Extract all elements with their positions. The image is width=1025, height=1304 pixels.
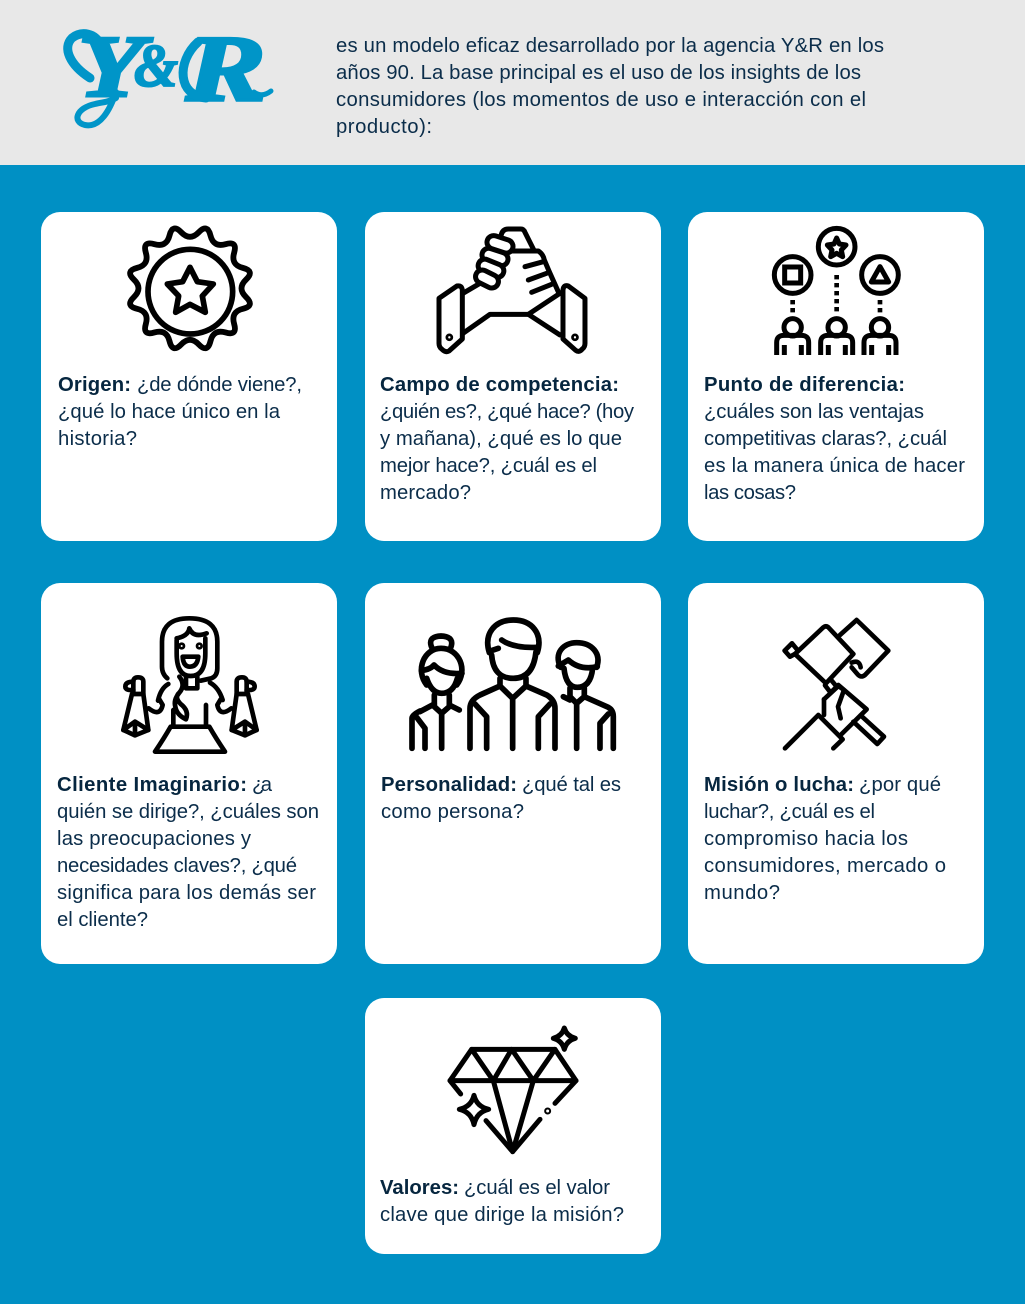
intro text: años 90. La base principal es el uso de los insights de los [336,62,861,84]
text: cliente imaginario: Cliente Imaginario: [57,774,247,796]
text: cliente imaginario: las preocupaciones y [57,828,252,850]
text: cliente imaginario: significa para los demás ser [57,882,316,904]
text: punto de diferencia [704,374,965,504]
panel: misión o lucha [688,583,984,964]
text: origen: Origen: [58,374,131,396]
panel: punto de diferencia [688,212,984,541]
text: campo de competencia [380,374,635,504]
text: punto de diferencia: competitivas claras?, ¿cuál [704,428,947,450]
icon: group of three people [412,620,613,748]
text: origen: ¿qué lo hace único en la [58,401,281,423]
panel: personalidad [365,583,661,964]
text: misión o lucha: Misión o lucha: [704,774,854,796]
text: origen: ¿de dónde viene?, [137,374,302,396]
text: misión o lucha: compromiso hacia los [704,828,908,850]
text: cliente imaginario: el cliente? [57,909,148,931]
intro text: producto): [336,116,432,138]
intro text: consumidores (los momentos de uso e interacción con el [336,89,866,111]
text: campo de competencia: Campo de competencia: [380,374,619,396]
text: personalidad: ¿qué tal es [522,774,621,796]
text: punto de diferencia: ¿cuáles son las ventajas [704,401,924,423]
text: punto de diferencia: las cosas? [704,482,796,504]
logo: Y&R: Y [78,19,153,116]
text: cliente imaginario: quién se dirige?, ¿cuáles son [57,801,319,823]
icon: handshake [439,229,585,352]
logo: Y&R: R [185,17,266,121]
text: misión o lucha: ¿por qué [859,774,941,796]
text: misión o lucha [704,774,946,904]
text: campo de competencia: ¿quién es?, ¿qué hace? (hoy [380,401,635,423]
text: cliente imaginario: ¿a [252,774,273,796]
text: campo de competencia: mercado? [380,482,471,504]
icon: diamond with sparkles [450,1028,576,1152]
text: personalidad [381,774,621,823]
text: misión o lucha: luchar?, ¿cuál es el [704,801,875,823]
text: cliente imaginario: necesidades claves?, ¿qué [57,855,297,877]
header band [0,0,1025,165]
text: punto de diferencia: Punto de diferencia: [704,374,905,396]
text: personalidad: como persona? [381,801,524,823]
panel: origen [41,212,337,541]
intro text: es un modelo eficaz desarrollado por la agencia Y&R en los [336,35,884,57]
text: personalidad: Personalidad: [381,774,517,796]
logo: Y&R: & [134,33,178,99]
panel: valores [365,998,661,1254]
text: campo de competencia: y mañana), ¿qué es lo que [380,428,622,450]
panel: cliente imaginario [41,583,337,964]
text: valores [380,1177,624,1226]
text: valores: clave que dirige la misión? [380,1204,624,1226]
text: campo de competencia: mejor hace?, ¿cuál es el [380,455,597,477]
panel: campo de competencia [365,212,661,541]
text: misión o lucha: consumidores, mercado o [704,855,946,877]
icon: three people with symbols [774,228,898,355]
logo: Y&R [68,17,271,125]
icon: badge with star [130,228,250,348]
icon: woman with shopping bags [123,618,257,752]
text: origen: historia? [58,428,137,450]
text: origen [58,374,302,450]
text: punto de diferencia: es la manera única de hacer [704,455,965,477]
text: valores: Valores: [380,1177,459,1199]
intro text [336,35,884,138]
text: misión o lucha: mundo? [704,882,780,904]
text: cliente imaginario [57,774,319,931]
text: valores: ¿cuál es el valor [464,1177,610,1199]
icon: raised fist holding flags [785,620,888,748]
